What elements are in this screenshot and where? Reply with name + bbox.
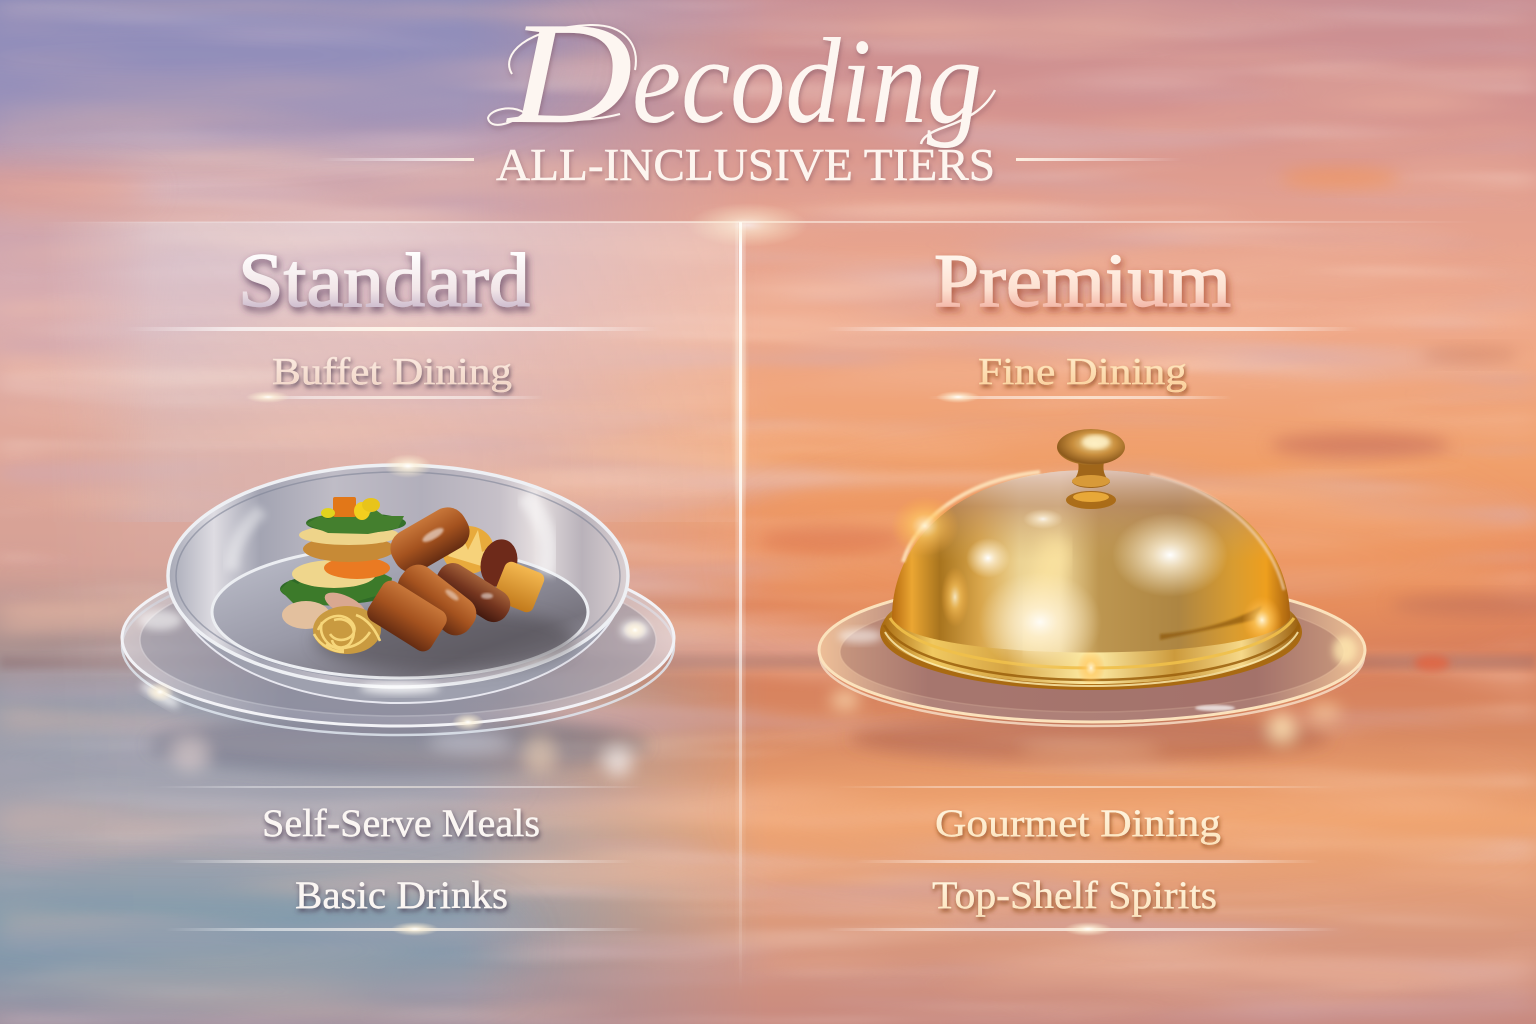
feature: top-shelf spirits: Top-Shelf Spirits: [932, 874, 1217, 917]
feature list: standard: [155, 786, 645, 936]
feature: self-serve meals: Self-Serve Meals: [262, 802, 540, 845]
floor reflection: [831, 690, 1341, 762]
glass bowl: [168, 454, 628, 703]
cloche knob: [1057, 429, 1125, 488]
heading: standard: [125, 239, 660, 331]
cloche rim: [880, 572, 1302, 690]
title: [318, 0, 1182, 190]
panel: standard tier glass tint: [80, 222, 738, 604]
cloche dome: [891, 470, 1290, 686]
divider frame with glow: [60, 203, 1480, 992]
title script word: ecoding: [632, 14, 982, 149]
heading: premium: Premium: [934, 239, 1231, 323]
food: layered stack: [280, 497, 406, 606]
serving plate: [819, 578, 1365, 726]
subheading: fine dining: Fine Dining: [978, 351, 1187, 393]
subheading: buffet dining: Buffet Dining: [272, 351, 512, 393]
heading: premium: [825, 239, 1360, 331]
food: chicken and noodles: [282, 588, 381, 654]
feature: gourmet dining: Gourmet Dining: [935, 802, 1221, 845]
floor reflection: [148, 715, 648, 776]
outer glass plate: [122, 550, 674, 735]
plate sparkle: [146, 620, 647, 731]
feature: basic drinks: Basic Drinks: [295, 874, 508, 917]
icon: golden cloche on plate: [819, 429, 1365, 762]
heading: standard: Standard: [238, 239, 530, 323]
subtitle: ALL-INCLUSIVE TIERS: [496, 139, 995, 190]
icon: glass plate with buffet food: [122, 454, 674, 776]
title script word: [488, 0, 995, 154]
subheading: fine dining: [928, 351, 1232, 403]
food: sausages: [363, 500, 546, 655]
feature list: premium: [825, 786, 1340, 936]
subheading: buffet dining: [245, 351, 545, 403]
